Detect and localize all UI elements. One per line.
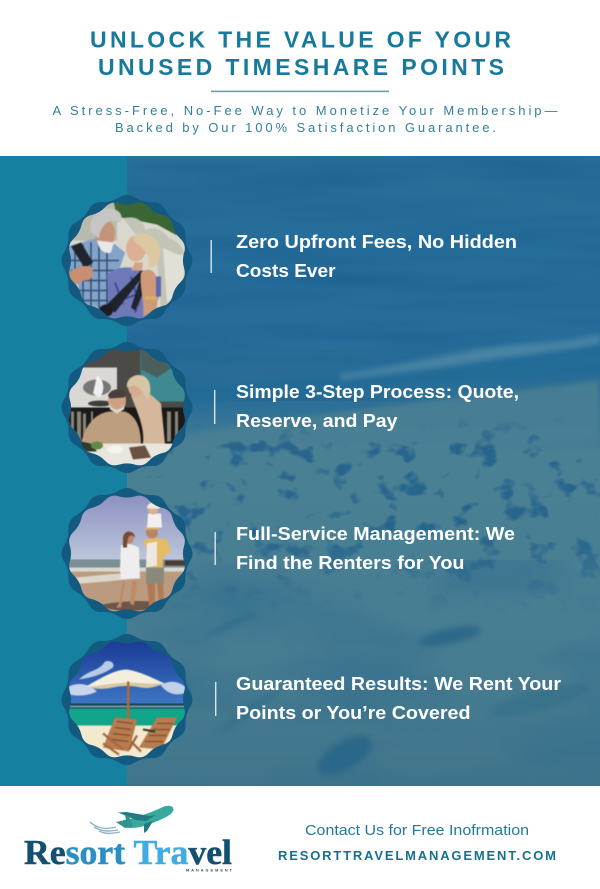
benefit 1: Zero Upfront Fees, No Hidden — [236, 231, 517, 252]
subtitle: A Stress-Free, No-Fee Way to Monetize Your Membership— — [52, 103, 557, 118]
website url: RESORTTRAVELMANAGEMENT.COM — [278, 848, 556, 863]
left teal strip — [0, 156, 127, 786]
sand texture — [180, 560, 600, 752]
benefit 4: Points or You’re Covered — [236, 702, 470, 723]
benefit 3 — [214, 523, 515, 573]
subtitle — [52, 103, 557, 135]
icon: family on beach photo — [62, 488, 192, 619]
title: UNLOCK THE VALUE OF YOUR — [90, 26, 511, 52]
benefit 4 — [215, 673, 561, 723]
benefit 1 — [210, 231, 517, 281]
benefit 1: Costs Ever — [236, 260, 336, 281]
panel: beach background band — [0, 156, 600, 786]
icon: senior couple photo — [62, 195, 192, 326]
benefit 3: Full-Service Management: We — [236, 523, 515, 544]
wordmark: Resort Travel — [24, 833, 232, 872]
benefit 2: Reserve, and Pay — [236, 410, 398, 431]
logo: Resort Travel Management — [24, 806, 233, 872]
icon: airplane — [90, 806, 173, 833]
contact text: Contact Us for Free Inofrmation — [305, 822, 529, 839]
logo: Resort Travel Management: MANAGEMENT — [186, 868, 233, 872]
benefit 2 — [214, 381, 519, 431]
benefit 2: Simple 3-Step Process: Quote, — [236, 381, 519, 402]
title: UNUSED TIMESHARE POINTS — [98, 54, 504, 80]
subtitle: Backed by Our 100% Satisfaction Guarantee. — [115, 120, 496, 135]
water texture — [320, 276, 370, 282]
benefit 4: Guaranteed Results: We Rent Your — [236, 673, 561, 694]
icon: couple at desk photo — [62, 342, 192, 473]
icon: beach umbrella and chairs photo — [57, 630, 197, 766]
benefit 3: Find the Renters for You — [236, 552, 464, 573]
title — [90, 26, 511, 80]
